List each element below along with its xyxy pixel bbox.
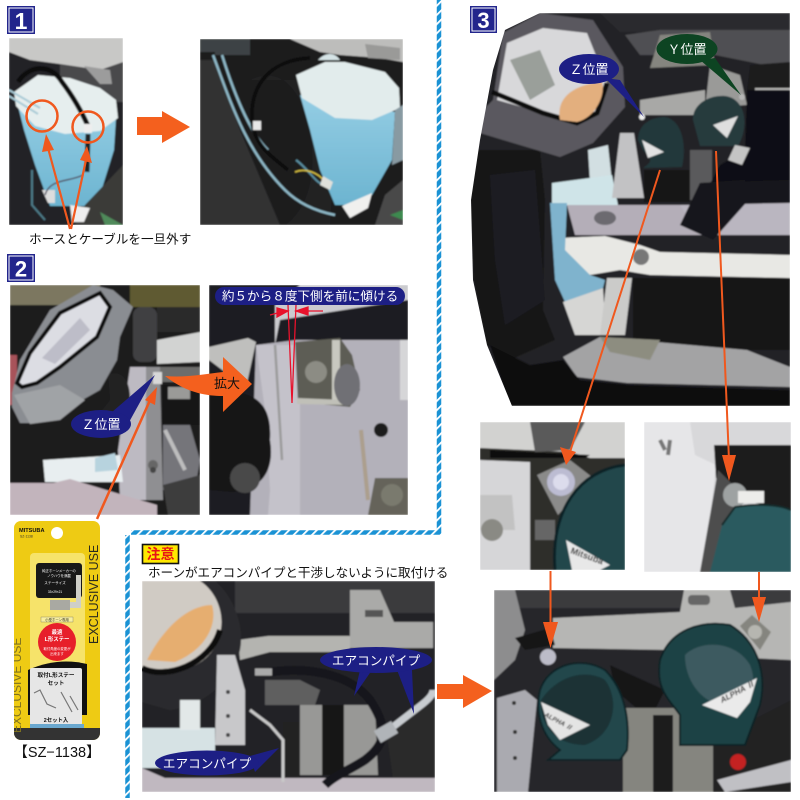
- product package SZ-1138: 33×29×21: [48, 590, 62, 594]
- photo: both horns installed: ALPHA Ⅱ: [718, 679, 756, 705]
- product package SZ-1138: MITSUBA: [19, 528, 44, 534]
- callout: Z position in step 3: Ｚ位置: [569, 62, 609, 77]
- label: tilt 5 to 8 degrees: 約５から８度下側を前に傾ける: [222, 288, 398, 304]
- callout: air conditioner pipe upper: [320, 647, 432, 714]
- product package SZ-1138: EXCLUSIVE USE: [10, 638, 24, 733]
- photo: Y position bolt detail: [644, 422, 791, 572]
- product package SZ-1138: 小型ホーン専用: [45, 617, 69, 622]
- arrow: stay to Z position: [97, 387, 157, 519]
- photo: both horns installed: ALPHA Ⅱ: [542, 711, 574, 732]
- callout: Z position in step 3: [559, 54, 644, 117]
- product package SZ-1138: EXCLUSIVE USE: [87, 545, 101, 644]
- callout: air conditioner pipe lower: [155, 748, 279, 776]
- callout: Z position in step 2: [71, 375, 155, 438]
- badge: step 1: [7, 6, 35, 34]
- badge: step 3: [470, 6, 497, 33]
- photo: enlarged bracket angle: [209, 285, 408, 515]
- product package SZ-1138: ノウハウを満載: [47, 573, 71, 578]
- product package SZ-1138: 2セット入: [44, 717, 69, 724]
- callout: air conditioner pipe lower: エアコンパイプ: [163, 757, 251, 771]
- arrow: step 1 before to after: [137, 111, 190, 143]
- arrows: positions from car to detail photos: [560, 151, 736, 481]
- photo: Z position bolt detail: [480, 422, 625, 570]
- caution text: ホーンがエアコンパイプと干渉しないように取付ける: [148, 566, 448, 580]
- callout: Z position in step 2: Ｚ位置: [81, 417, 121, 432]
- dashed divider lines: [128, 0, 439, 798]
- photo: washer tank with hose attached: [9, 38, 123, 225]
- product package SZ-1138: [10, 521, 101, 740]
- callout: Y position in step 3: [656, 34, 741, 95]
- badge: step 1: 1: [15, 8, 28, 34]
- product package SZ-1138: ステーサイズ: [44, 580, 66, 585]
- arrow: enlarge: 拡大: [214, 376, 240, 391]
- label: caution: 注意: [146, 546, 174, 562]
- product package SZ-1138: 出来ます: [50, 651, 64, 656]
- badge: step 3: 3: [477, 8, 490, 33]
- photo: both horns installed: [494, 590, 791, 792]
- callout circles and arrows: hose and cable: [26, 100, 104, 229]
- product package SZ-1138: 純正ホーンメーカーの: [42, 568, 76, 573]
- product code: 【SZ−1138】: [13, 744, 101, 761]
- product package SZ-1138: L形ステー: [45, 635, 69, 643]
- badge: step 2: [7, 254, 35, 282]
- callout: air conditioner pipe upper: エアコンパイプ: [332, 654, 420, 668]
- product package SZ-1138: 取付L形ステー: [38, 671, 75, 679]
- arrow: enlarge: [165, 357, 252, 412]
- product package SZ-1138: SZ-1138: [20, 534, 33, 538]
- arrow: caution photo to result: [437, 675, 492, 708]
- arrows: detail photos to result: [543, 571, 766, 648]
- photo: air conditioner pipe: [142, 581, 435, 792]
- red angle marks: [270, 305, 323, 403]
- product package SZ-1138: セット: [48, 680, 64, 687]
- photo: Z position bolt detail: Mitsuba: [569, 545, 606, 567]
- photo: headlamp and Z position: [10, 285, 200, 515]
- label: caution: [142, 544, 178, 564]
- caption: remove hose and cable: ホースとケーブルを一旦外す: [29, 232, 191, 246]
- callout: Y position in step 3: Ｙ位置: [667, 42, 707, 57]
- badge: step 2: 2: [15, 256, 27, 282]
- product package SZ-1138: 最適: [52, 628, 63, 636]
- photo: front of car with horn positions: [470, 13, 790, 406]
- product package SZ-1138: 取付角度の変更が: [43, 646, 71, 651]
- photo: washer tank with hose removed: [200, 39, 403, 225]
